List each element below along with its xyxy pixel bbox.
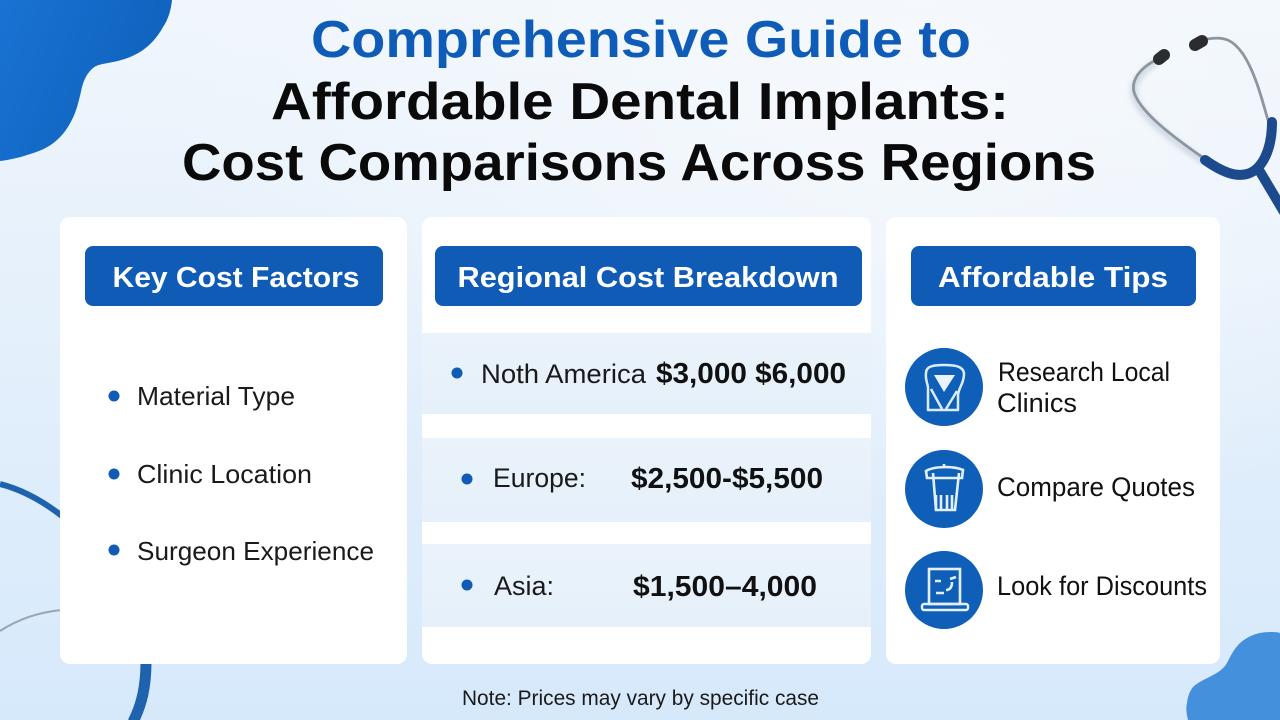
row: europe: Europe: [493,463,586,493]
heading: key cost factors [85,246,383,306]
row: north america [422,333,871,414]
list item: surgeon experience: Surgeon Experience [137,536,374,566]
tip text: research local clinics [997,357,1170,418]
heading: key cost factors: Key Cost Factors [112,262,360,294]
heading: regional cost breakdown [435,246,862,306]
tip text: look for discounts: Look for Discounts [997,571,1207,601]
row: north america: $3,000 $6,000 [656,358,846,390]
panel: regional cost breakdown [422,217,871,664]
row: north america: Noth America [481,359,647,389]
list item: clinic location: Clinic Location [137,459,312,489]
icon: document [905,551,983,629]
title line 2: Affordable Dental Implants: [271,73,1009,131]
list item: material type: Material Type [137,381,295,411]
panel: affordable tips [886,217,1220,664]
tip text: research local clinics: Clinics [997,388,1077,418]
title line 3: Cost Comparisons Across Regions [182,134,1096,192]
tip text: compare quotes: Compare Quotes [997,472,1195,502]
panel: key cost factors [60,217,407,664]
icon: dental shield [905,348,983,426]
heading: regional cost breakdown: Regional Cost Breakdown [458,262,838,294]
icon: bin with lid [905,450,983,528]
tip text: research local clinics: Research Local [998,357,1170,387]
heading: affordable tips [911,246,1196,306]
footnote: Note: Prices may vary by specific case [462,687,819,710]
title line 1: Comprehensive Guide to [311,11,971,69]
title [182,11,1096,192]
row: asia: Asia: [494,571,554,601]
decorative blob: bottom right [1186,632,1280,720]
row: europe: $2,500-$5,500 [631,463,823,495]
illustration: stethoscope tube bottom left [0,484,146,720]
row: asia: $1,500–4,000 [633,571,817,603]
heading: affordable tips: Affordable Tips [938,262,1168,294]
row: asia [422,544,871,627]
illustration: stethoscope top right [1133,38,1280,212]
row: europe [422,438,871,522]
decorative blob: top left [0,0,172,161]
